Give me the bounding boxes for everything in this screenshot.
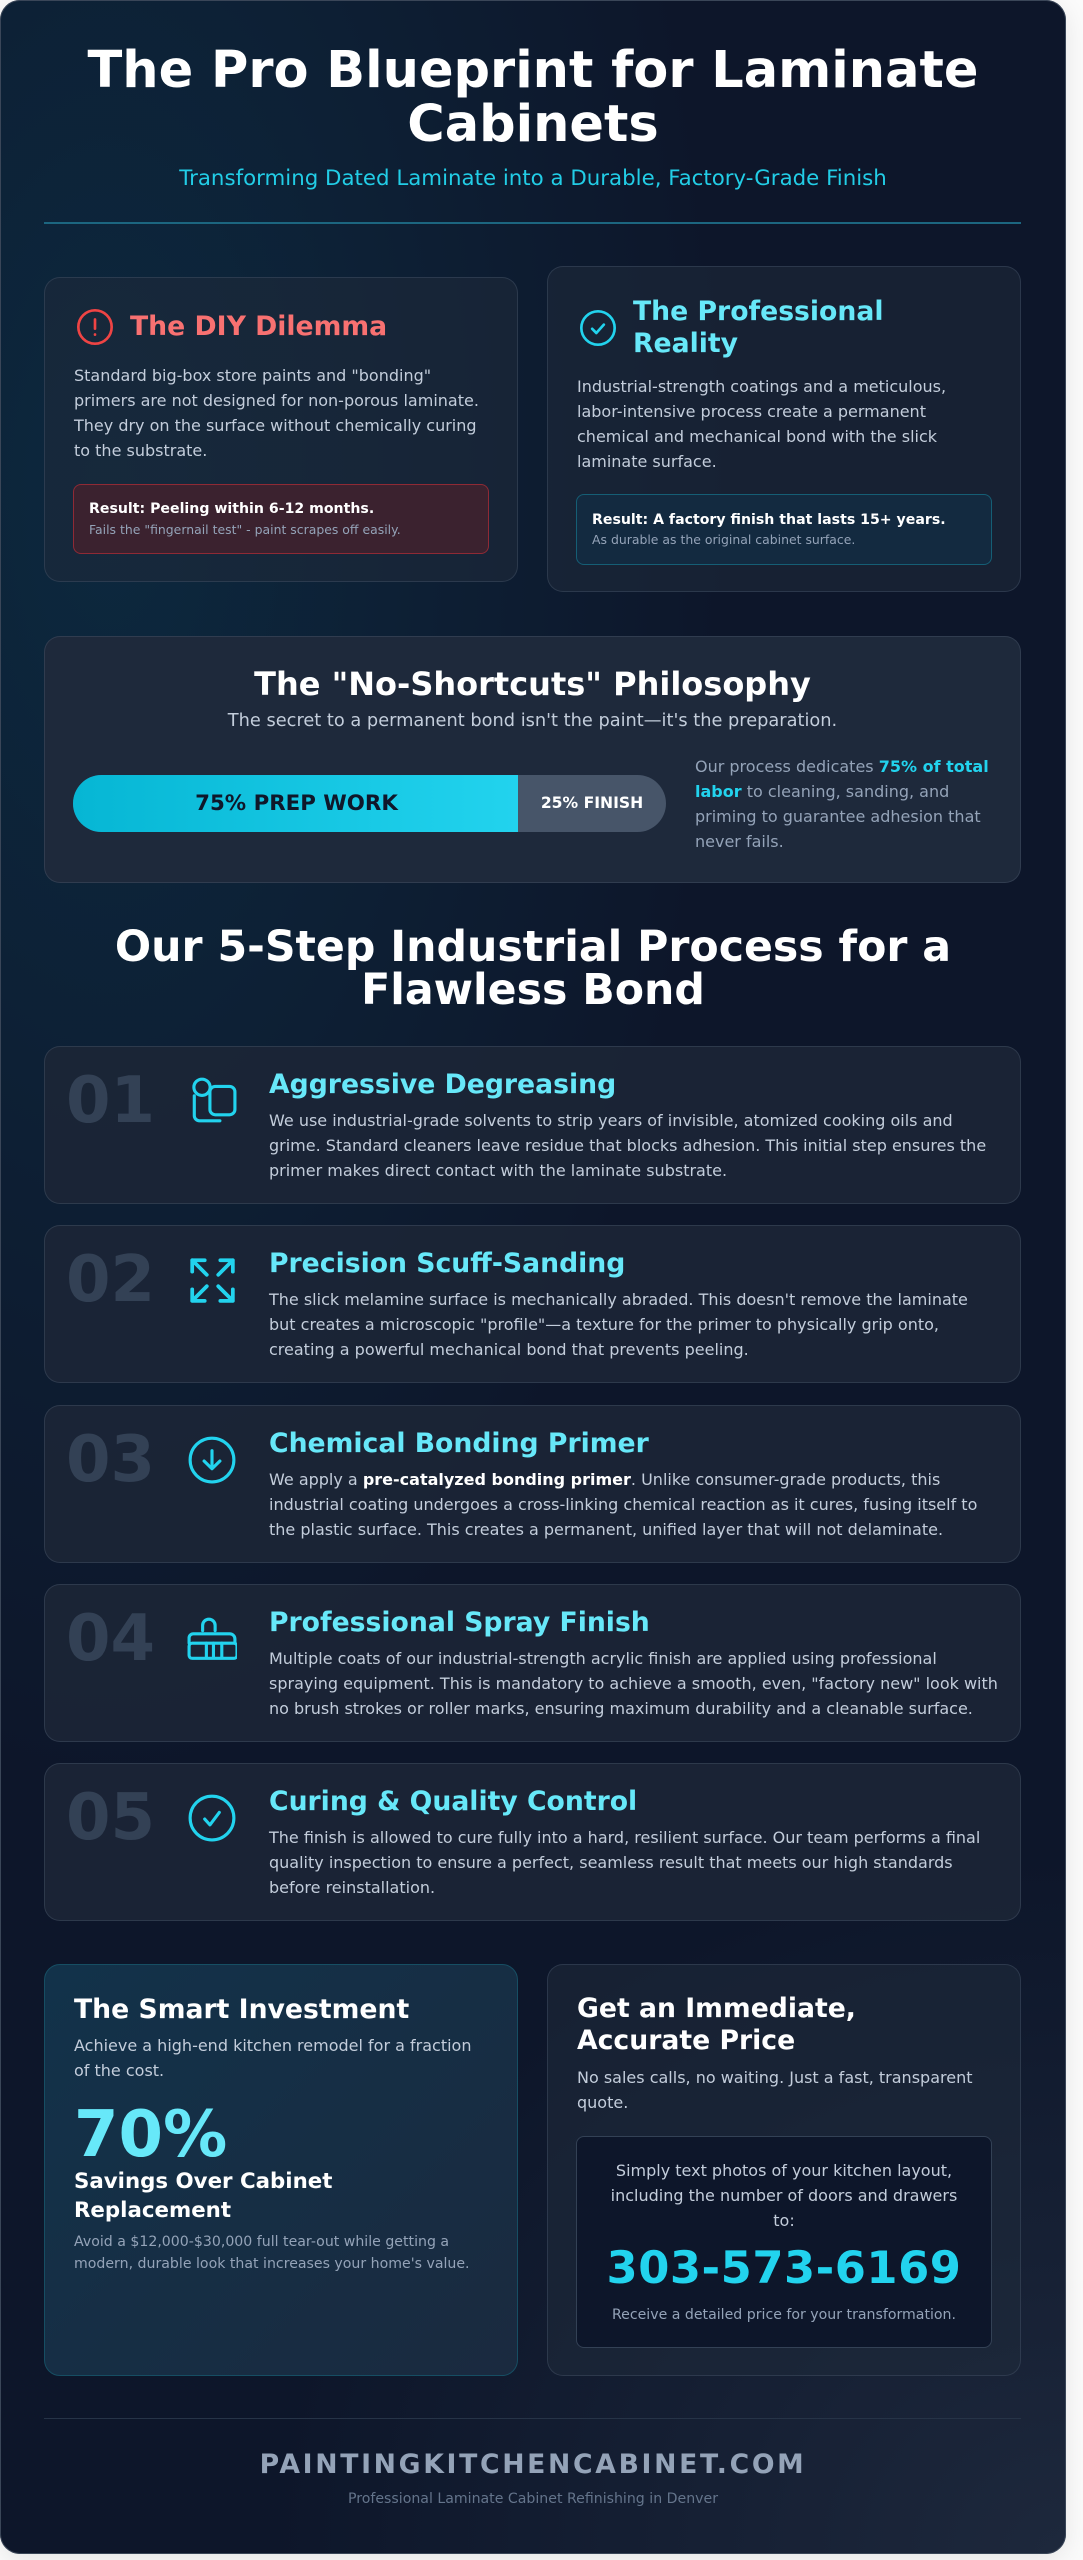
callout: DIY result	[73, 484, 489, 554]
text: quote description: quote.	[577, 2093, 628, 2112]
text: labor explanation: never fails.	[695, 832, 784, 851]
heading: immediate price	[577, 1993, 856, 2056]
icon: degreasing shapes	[192, 1078, 236, 1122]
panel: the professional reality	[547, 266, 1021, 592]
icon: spray equipment	[188, 1618, 237, 1660]
text: savings detail: modern, durable look that increases your home's value.	[74, 2256, 470, 2272]
step description: Multiple coats of our industrial-strength acrylic finish are applied using professional	[269, 1649, 937, 1668]
panel: the DIY dilemma	[44, 277, 518, 582]
step description	[269, 1470, 977, 1539]
step description	[268, 1290, 968, 1359]
step description	[268, 1828, 980, 1897]
text: professional description: laminate surface.	[577, 452, 717, 471]
step description: The slick melamine surface is mechanically abraded. This doesn't remove the laminate	[269, 1290, 968, 1309]
step description: The finish is allowed to cure fully into a hard, resilient surface. Our team performs a final	[269, 1828, 980, 1847]
text: DIY description: to the substrate.	[74, 441, 207, 460]
text: investment description: Achieve a high-end kitchen remodel for a fraction	[74, 2036, 471, 2055]
heading: 5-step process: Flawless Bond	[361, 965, 705, 1015]
panel: get an immediate price	[547, 1964, 1021, 2376]
text: investment description	[74, 2036, 471, 2080]
title: Cabinets	[407, 95, 659, 154]
heading: professional reality	[633, 296, 883, 359]
step 3: chemical bonding primer	[44, 1405, 1021, 1563]
step number: 02	[66, 1243, 155, 1317]
step description: quality inspection to ensure a perfect, seamless result that meets our high standards	[269, 1853, 953, 1872]
icon: check circle	[580, 310, 616, 346]
phone number: 303-573-6169	[607, 2241, 961, 2294]
step description: the plastic surface. This creates a permanent, unified layer that will not delaminate.	[269, 1520, 943, 1539]
step 1: aggressive degreasing	[44, 1046, 1021, 1204]
icon: warning circle	[77, 309, 113, 345]
text: quote description: No sales calls, no waiting. Just a fast, transparent	[577, 2068, 972, 2087]
heading: immediate price: Get an Immediate,	[577, 1993, 856, 2024]
result headline: Result: A factory finish that lasts 15+ years.	[592, 512, 946, 528]
step description: industrial coating undergoes a cross-linking chemical reaction as it cures, fusing itself to	[269, 1495, 977, 1514]
footer brand: PAINTINGKITCHENCABINET.COM	[260, 2449, 806, 2480]
text: investment description: of the cost.	[74, 2061, 164, 2080]
text: contact note: Receive a detailed price for your transformation.	[612, 2307, 956, 2323]
step description	[269, 1111, 986, 1180]
step description: spraying equipment. This is mandatory to achieve a smooth, even, "factory new" look with	[269, 1674, 998, 1693]
text: labor explanation	[695, 757, 989, 851]
text: professional description: labor-intensive process create a permanent	[577, 402, 926, 421]
callout: phone contact	[576, 2136, 992, 2348]
icon: check circle	[188, 1794, 236, 1842]
text: labor explanation: Our process dedicates 75% of total	[695, 757, 989, 776]
step title: Aggressive Degreasing	[269, 1069, 616, 1100]
icon: arrow down circle	[188, 1436, 236, 1484]
text: contact instructions	[611, 2161, 957, 2230]
stat label: Replacement	[74, 2198, 231, 2223]
step description	[269, 1649, 998, 1718]
step description: We apply a pre-catalyzed bonding primer. Unlike consumer-grade products, this	[269, 1470, 940, 1489]
text: labor explanation: priming to guarantee adhesion that	[695, 807, 981, 826]
text: contact instructions: Simply text photos of your kitchen layout,	[616, 2161, 952, 2180]
title: The Pro Blueprint for Laminate	[88, 41, 978, 100]
text: professional description: chemical and mechanical bond with the slick	[577, 427, 937, 446]
text: DIY description	[74, 366, 479, 460]
heading: professional reality: The Professional	[633, 296, 883, 327]
step number: 04	[66, 1602, 155, 1676]
footer tagline: Professional Laminate Cabinet Refinishing in Denver	[348, 2491, 718, 2507]
heading: 5-step process	[115, 922, 951, 1015]
step description: primer makes direct contact with the laminate substrate.	[269, 1161, 727, 1180]
heading: immediate price: Accurate Price	[577, 2025, 795, 2056]
step title: Precision Scuff-Sanding	[269, 1248, 625, 1279]
step title: Professional Spray Finish	[269, 1607, 650, 1638]
bar chart: labor split	[73, 775, 666, 832]
step description: but creates a microscopic "profile"—a texture for the primer to physically grip onto,	[269, 1315, 939, 1334]
heading: DIY dilemma: The DIY Dilemma	[130, 311, 387, 342]
result detail: As durable as the original cabinet surface.	[592, 532, 855, 547]
step 4: professional spray finish	[44, 1584, 1021, 1742]
heading: 5-step process: Our 5-Step Industrial Process for a	[115, 922, 951, 972]
step description: before reinstallation.	[269, 1878, 435, 1897]
text: labor explanation: labor to cleaning, sanding, and	[695, 782, 949, 801]
step title: Curing & Quality Control	[269, 1786, 637, 1817]
stat: 70% savings: 70%	[74, 2098, 227, 2172]
subtitle: Transforming Dated Laminate into a Durable, Factory-Grade Finish	[179, 166, 887, 191]
text: quote description	[577, 2068, 972, 2112]
step number: 03	[66, 1423, 155, 1497]
step number: 05	[66, 1781, 155, 1855]
bar segment: 75% prep work: 75% PREP WORK	[195, 791, 398, 816]
step description: creating a powerful mechanical bond that prevents peeling.	[269, 1340, 749, 1359]
heading: smart investment: The Smart Investment	[74, 1994, 409, 2025]
text: DIY description: primers are not designed for non-porous laminate.	[74, 391, 479, 410]
icon: expanding arrows	[190, 1258, 235, 1303]
text: DIY description: They dry on the surface without chemically curing	[74, 416, 477, 435]
bar segment: 75% prep work	[73, 775, 518, 832]
callout: professional result	[576, 494, 992, 565]
heading: philosophy: The "No-Shortcuts" Philosophy	[254, 665, 811, 703]
text: savings detail: Avoid a $12,000-$30,000 full tear-out while getting a	[74, 2234, 449, 2250]
result headline: Result: Peeling within 6-12 months.	[89, 501, 374, 517]
text: contact instructions: including the number of doors and drawers	[611, 2186, 957, 2205]
text: professional description: Industrial-strength coatings and a meticulous,	[577, 377, 946, 396]
text: contact instructions: to:	[773, 2211, 795, 2230]
step description: grime. Standard cleaners leave residue that blocks adhesion. This initial step ensures the	[269, 1136, 986, 1155]
bar segment: 25% finish: 25% FINISH	[541, 794, 643, 812]
stat label: Savings Over Cabinet	[74, 2169, 332, 2194]
step 5: curing and quality control	[44, 1763, 1021, 1921]
text: professional description	[577, 377, 946, 471]
result detail: Fails the "fingernail test" - paint scrapes off easily.	[89, 522, 401, 537]
step title: Chemical Bonding Primer	[269, 1428, 649, 1459]
step number: 01	[66, 1064, 155, 1138]
title	[88, 41, 978, 154]
step description: no brush strokes or roller marks, ensuring maximum durability and a cleanable surface.	[269, 1699, 973, 1718]
heading: professional reality: Reality	[633, 328, 738, 359]
stat label	[74, 2169, 332, 2223]
text: savings detail	[74, 2234, 470, 2272]
text: DIY description: Standard big-box store paints and "bonding"	[74, 366, 431, 385]
step 2: precision scuff-sanding	[44, 1225, 1021, 1383]
panel: the smart investment	[44, 1964, 518, 2376]
step description: We use industrial-grade solvents to strip years of invisible, atomized cooking oils and	[269, 1111, 953, 1130]
panel: no-shortcuts philosophy	[44, 636, 1021, 883]
subheading: philosophy: The secret to a permanent bond isn't the paint—it's the preparation.	[228, 710, 837, 731]
